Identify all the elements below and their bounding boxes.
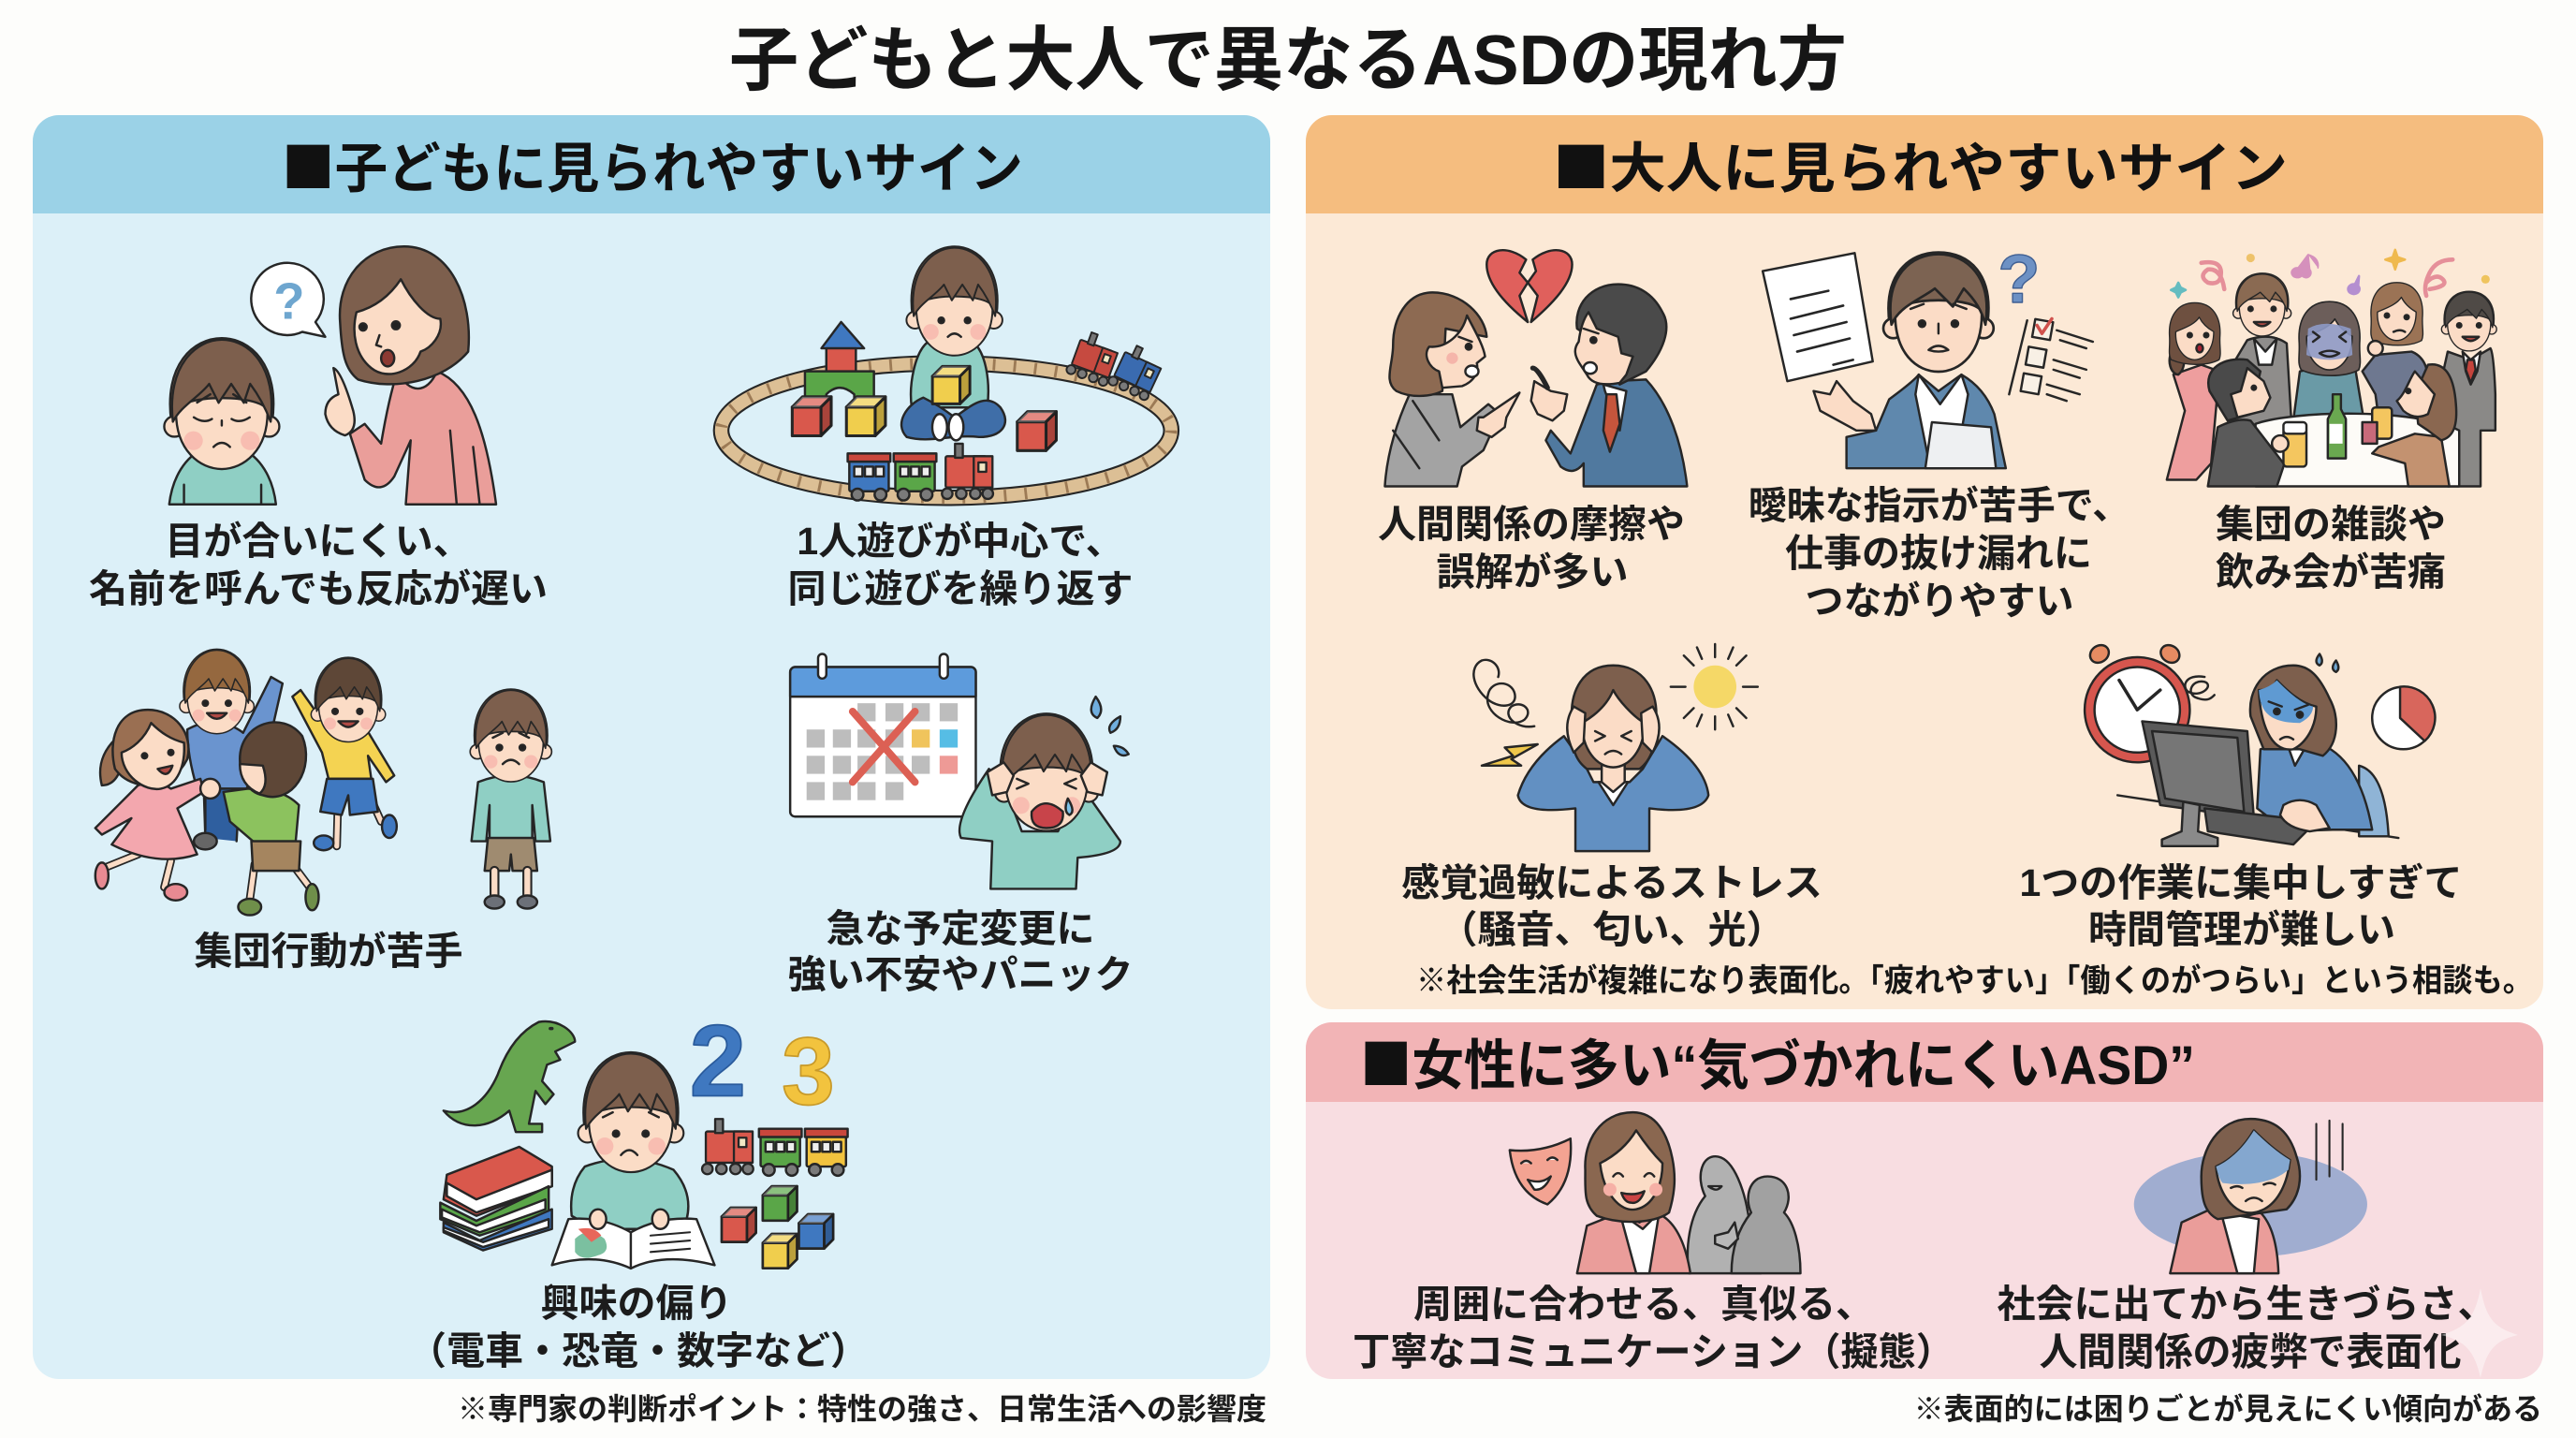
label bbox=[1749, 484, 2130, 623]
label: 強い不安やパニック bbox=[788, 953, 1133, 996]
label bbox=[408, 1282, 869, 1372]
panel: adults' signs bbox=[1306, 115, 2543, 1009]
sign: schedule changes bbox=[788, 653, 1133, 996]
heading: women's hidden ASD bbox=[1306, 1021, 2543, 1102]
sign: group small talk bbox=[2167, 250, 2496, 594]
label: 丁寧なコミュニケーション（擬態） bbox=[1353, 1330, 1954, 1373]
label bbox=[1401, 861, 1822, 951]
icon: mother speaking to boy bbox=[164, 246, 496, 505]
label bbox=[788, 907, 1133, 996]
sign: group activities bbox=[95, 649, 551, 973]
label bbox=[1378, 503, 1685, 594]
note: social life: ※社会生活が複雑になり表面化。「疲れやすい」「働くのがつらい」という相談も。 bbox=[1416, 962, 2533, 999]
label: 急な予定変更に bbox=[826, 907, 1095, 950]
label: 集団の雑談や bbox=[2216, 503, 2446, 546]
icon: confused man with document and checklist: ? bbox=[1998, 240, 2040, 317]
sign: masking bbox=[1353, 1112, 1954, 1373]
icon: smiling mask, woman and gray figures bbox=[1510, 1112, 1800, 1273]
label: 誤解が多い bbox=[1436, 550, 1629, 594]
icon: boy with blocks and toy train track bbox=[721, 246, 1171, 501]
label: 仕事の抜け漏れに bbox=[1785, 532, 2092, 575]
icon: woman and man arguing with broken heart bbox=[1384, 250, 1687, 486]
icon: woman covering ears with sun, noise spiral and lightning bbox=[1473, 644, 1758, 851]
label: 社会に出てから生きづらさ、 bbox=[1998, 1283, 2496, 1326]
label: 時間管理が難しい bbox=[2088, 908, 2395, 951]
label bbox=[2216, 503, 2446, 594]
sign: difficulties after entering society bbox=[1998, 1119, 2496, 1373]
label: 感覚過敏によるストレス bbox=[1401, 861, 1822, 904]
sign: interpersonal friction bbox=[1378, 250, 1687, 594]
heading: adults' signs: ■大人に見られやすいサイン bbox=[1553, 125, 2288, 203]
decorative sparkle bbox=[2441, 1288, 2518, 1378]
icon: boy reading among dinosaur, books, numbers, train and blocks: 3 bbox=[782, 1018, 835, 1124]
label: 1人遊びが中心で、 bbox=[797, 520, 1124, 563]
sign: solitary play bbox=[721, 246, 1171, 610]
sign: ambiguous instructions bbox=[1749, 240, 2130, 623]
icon: woman at computer with clock bbox=[2085, 641, 2435, 846]
label bbox=[788, 520, 1133, 610]
heading: adults' signs bbox=[1306, 115, 2543, 213]
sign: time management bbox=[2020, 641, 2462, 951]
label bbox=[89, 520, 548, 610]
icon: children playing while one boy stands apart bbox=[95, 649, 551, 916]
label: 人間関係の摩擦や bbox=[1378, 503, 1685, 546]
sign: restricted interests bbox=[408, 1005, 869, 1372]
heading: children's signs bbox=[33, 115, 1270, 213]
label: 曖昧な指示が苦手で、 bbox=[1749, 484, 2130, 527]
label: 同じ遊びを繰り返す bbox=[788, 567, 1133, 610]
label: 目が合いにくい、 bbox=[165, 520, 472, 563]
label: （騒音、匂い、光） bbox=[1440, 908, 1784, 951]
label: つながりやすい bbox=[1805, 580, 2074, 623]
note: women's ASD: ※表面的には困りごとが見えにくい傾向がある bbox=[1914, 1392, 2542, 1426]
note: specialist judgement: ※専門家の判断ポイント：特性の強さ、日常生活への影響度 bbox=[458, 1392, 1266, 1426]
label bbox=[1998, 1283, 2496, 1373]
label: 興味の偏り bbox=[541, 1282, 732, 1325]
icon: exhausted woman with dark cloud bbox=[2134, 1119, 2367, 1273]
label bbox=[2020, 861, 2462, 951]
icon: boy reading among dinosaur, books, numbers, train and blocks bbox=[440, 1005, 848, 1269]
icon: confused man with document and checklist bbox=[1763, 240, 2093, 468]
label: 名前を呼んでも反応が遅い bbox=[89, 567, 548, 610]
sign: eye contact bbox=[89, 246, 548, 610]
icon: boy reading among dinosaur, books, numbers, train and blocks: 2 bbox=[690, 1005, 746, 1119]
panel: women's hidden ASD bbox=[1306, 1021, 2543, 1379]
title: 子どもと大人で異なるASDの現れ方 bbox=[729, 21, 1847, 99]
label: 1つの作業に集中しすぎて bbox=[2020, 861, 2462, 904]
label: 集団行動が苦手 bbox=[195, 930, 462, 973]
label: 周囲に合わせる、真似る、 bbox=[1413, 1283, 1874, 1326]
icon: office party with overwhelmed woman bbox=[2167, 250, 2496, 486]
panel: children's signs bbox=[33, 115, 1270, 1379]
heading: women's hidden ASD: ■女性に多い“気づかれにくいASD” bbox=[1360, 1021, 2195, 1100]
icon: mother speaking to boy: ? bbox=[273, 272, 304, 330]
heading: children's signs: ■子どもに見られやすいサイン bbox=[282, 125, 1023, 203]
label bbox=[1353, 1283, 1954, 1373]
label: （電車・恐竜・数字など） bbox=[408, 1329, 869, 1372]
label: 飲み会が苦痛 bbox=[2216, 550, 2446, 594]
label: 人間関係の疲弊で表面化 bbox=[2039, 1330, 2462, 1373]
icon: calendar and crying boy bbox=[790, 653, 1129, 888]
sign: sensory hypersensitivity bbox=[1401, 644, 1822, 951]
